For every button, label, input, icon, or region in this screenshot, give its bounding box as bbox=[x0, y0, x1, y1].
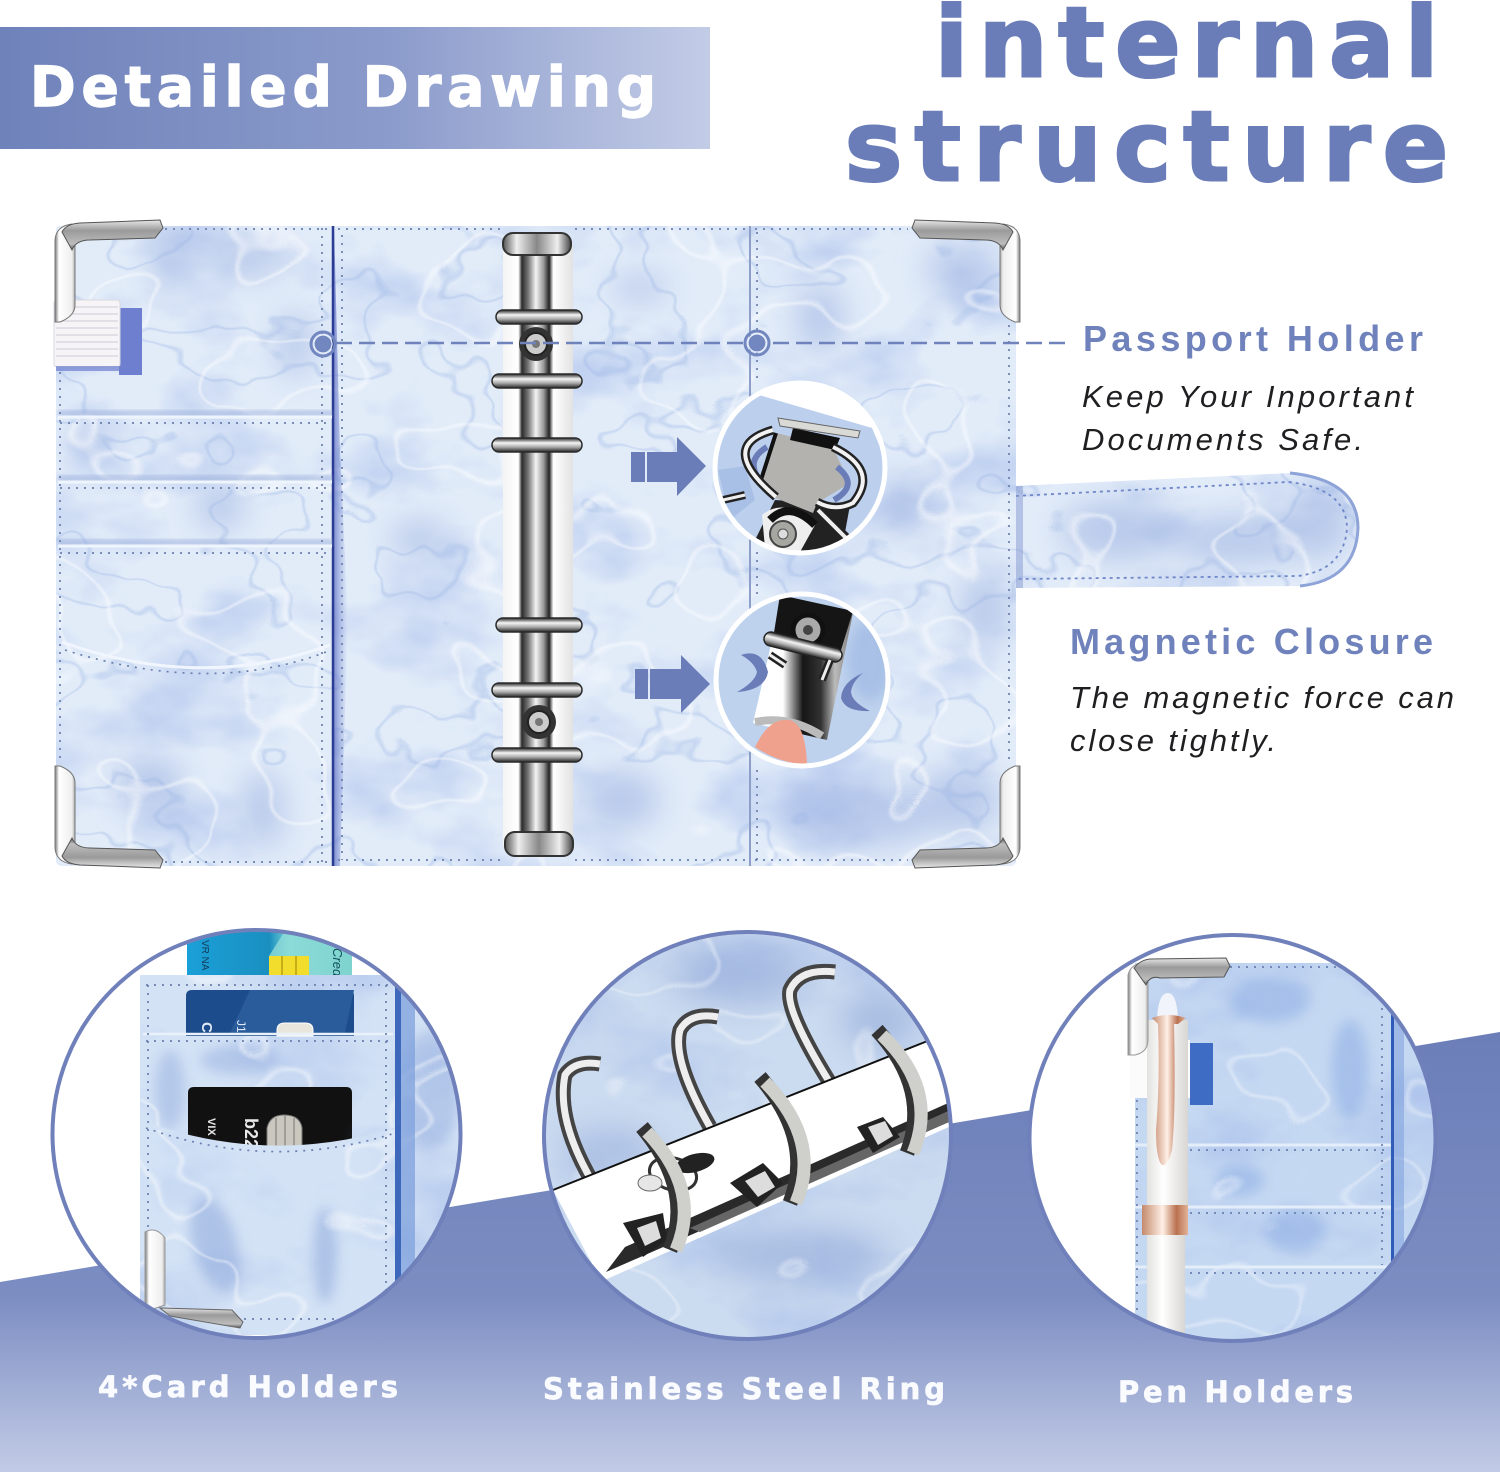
back rings bbox=[563, 971, 835, 1183]
blue turn arrows bbox=[754, 447, 767, 485]
circle detail: stainless steel ring bbox=[540, 930, 960, 1345]
arrow: to bottom inset bbox=[635, 655, 710, 713]
pen bbox=[1142, 993, 1188, 1345]
metal corner: bottom left bbox=[55, 766, 163, 868]
circle detail: card holders bbox=[52, 925, 470, 1338]
description: Keep Your Inportant bbox=[1082, 379, 1414, 414]
text: Passport Holder bbox=[1082, 318, 1423, 457]
description: Documents Safe. bbox=[1082, 422, 1363, 457]
teal card bbox=[187, 932, 352, 975]
navy card: C bbox=[198, 1022, 215, 1033]
right marble band bbox=[395, 987, 401, 1276]
steel plate bbox=[760, 433, 850, 513]
banner heading: Detailed Drawing bbox=[30, 55, 656, 119]
steel plate bbox=[553, 1040, 960, 1279]
label: Stainless Steel Ring: Stainless Steel Ring bbox=[543, 1372, 945, 1406]
right panel seam bbox=[749, 226, 751, 866]
blue turn arrows bbox=[737, 653, 768, 692]
rivet bbox=[638, 1152, 714, 1192]
rings bbox=[492, 310, 582, 762]
navy card: J1 bbox=[234, 1020, 248, 1033]
black card bbox=[188, 1087, 352, 1146]
description bbox=[1070, 680, 1454, 758]
description: The magnetic force can bbox=[1070, 680, 1454, 715]
open rings bbox=[745, 430, 776, 497]
finger bbox=[755, 720, 807, 764]
ring binder mechanism bbox=[492, 233, 582, 856]
title: internal structure bbox=[845, 0, 1448, 203]
rivet bbox=[762, 507, 815, 552]
elastic pen loop bbox=[54, 300, 142, 375]
metal corner: bottom right bbox=[912, 766, 1020, 868]
metal corner: top left bbox=[55, 220, 163, 322]
title: internal structure: structure bbox=[845, 91, 1448, 203]
steel plate bbox=[753, 614, 853, 740]
marker left bbox=[311, 332, 335, 356]
marker right bbox=[745, 331, 769, 355]
arrow: to top inset bbox=[631, 437, 706, 496]
cover marble bbox=[1135, 963, 1445, 1348]
spine shadow bbox=[334, 226, 348, 866]
heading: Passport Holder bbox=[1083, 318, 1423, 359]
circle detail: pen holders bbox=[1030, 935, 1445, 1348]
seam bbox=[1391, 1005, 1394, 1270]
marble surface of cover bbox=[50, 220, 1365, 870]
label: 4*Card Holders: 4*Card Holders bbox=[98, 1370, 398, 1404]
elastic loop bbox=[1130, 1040, 1213, 1105]
background slanted band bbox=[0, 1032, 1500, 1472]
second pocket bbox=[143, 1034, 393, 1041]
silver corner bbox=[1128, 958, 1230, 1055]
pockets bbox=[1135, 967, 1392, 1330]
card pockets bbox=[58, 410, 332, 674]
banner: Detailed Drawing bbox=[0, 27, 710, 149]
inset: ring closing with finger bbox=[710, 590, 900, 770]
label: Pen Holders: Pen Holders bbox=[1118, 1375, 1353, 1409]
black card: VIX bbox=[205, 1118, 217, 1136]
inset: ring open view bbox=[712, 380, 888, 556]
navy card bbox=[186, 990, 354, 1036]
silver corner bbox=[145, 1230, 243, 1328]
ring bbox=[762, 631, 844, 663]
front pocket bbox=[146, 1126, 395, 1305]
stitching bbox=[60, 228, 1009, 862]
magnetic strap bbox=[1016, 473, 1358, 588]
teal card: Cred bbox=[330, 948, 345, 977]
front rings bbox=[642, 1030, 921, 1250]
teal card: VR NA bbox=[199, 940, 210, 971]
ring slots bbox=[623, 1117, 900, 1257]
black card: b22 bbox=[241, 1118, 261, 1149]
text: Magnetic Closure bbox=[1070, 621, 1454, 758]
leader line: passport holder bbox=[311, 331, 1066, 356]
heading: Magnetic Closure bbox=[1070, 621, 1433, 662]
rivet top bbox=[519, 327, 553, 361]
description: close tightly. bbox=[1070, 723, 1276, 758]
metal corner: top right bbox=[912, 220, 1020, 322]
spine seam bbox=[332, 226, 334, 866]
open binder cover bbox=[50, 220, 1365, 870]
stitches bbox=[146, 985, 390, 1319]
cover marble bbox=[140, 975, 458, 1274]
rivet bottom bbox=[522, 705, 556, 739]
description bbox=[1082, 379, 1414, 457]
